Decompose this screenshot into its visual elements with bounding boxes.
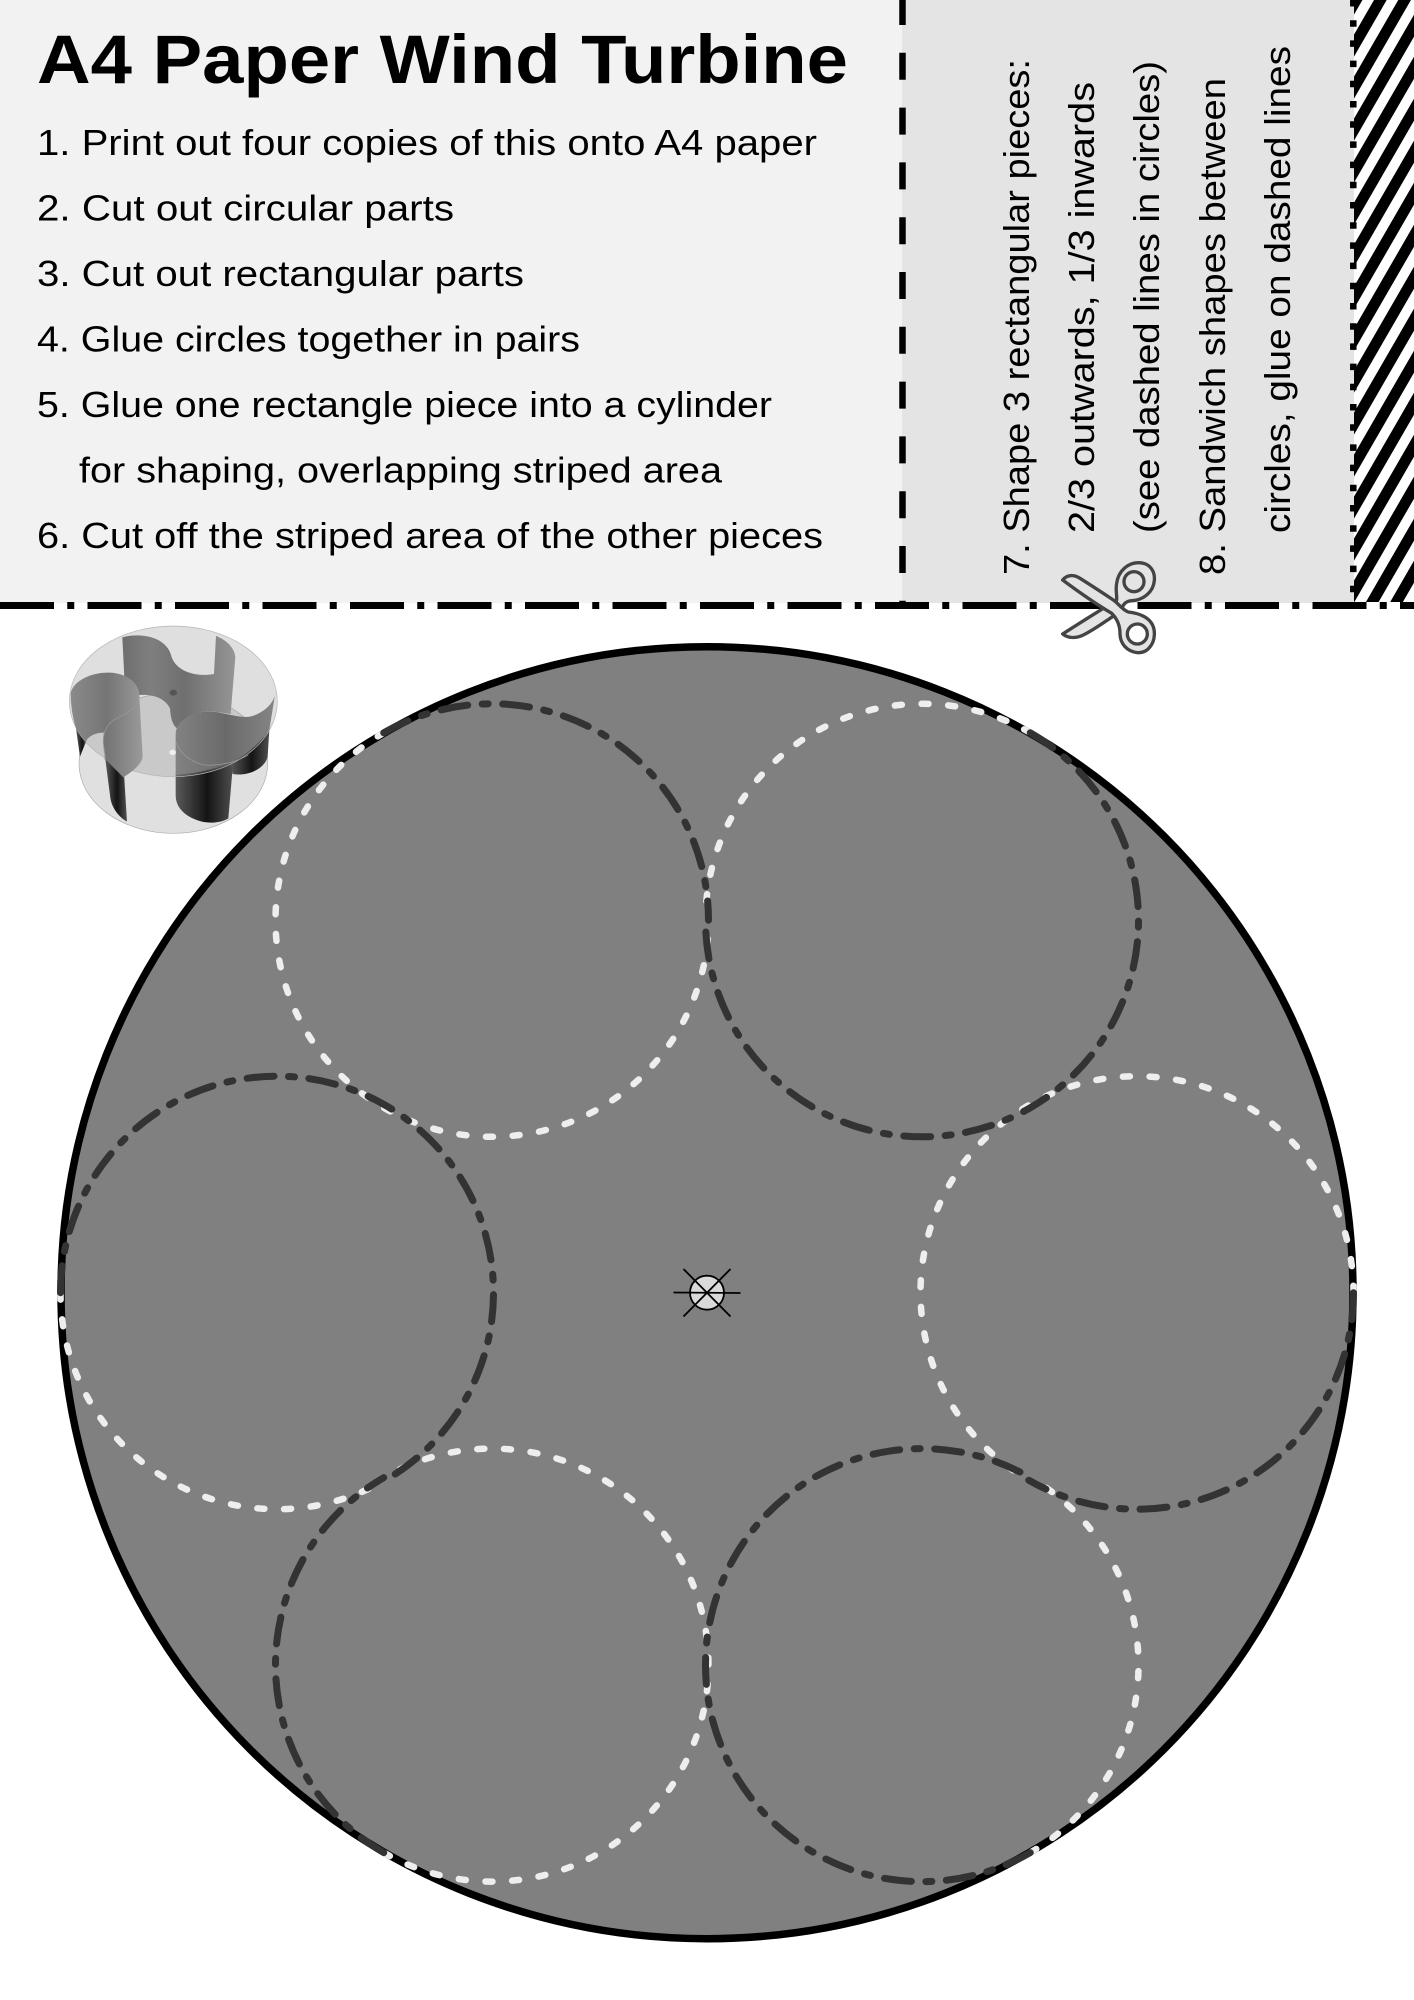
inward arcs: dash-dot dark	[60, 704, 1354, 1882]
blade lower sections	[76, 728, 269, 823]
step 3: 3. Cut out rectangular parts	[37, 253, 524, 294]
bottom disc centre hole	[169, 750, 176, 755]
top disc centre hole	[170, 690, 177, 696]
vertical cut line	[899, 0, 906, 606]
step 1: 1. Print out four copies of this onto A4 paper	[37, 122, 817, 163]
icon: assembled turbine	[69, 626, 277, 833]
panel: rotated instructions	[902, 0, 1354, 603]
step 2: 2. Cut out circular parts	[37, 188, 454, 228]
step 7 outwards and inwards: 2/3 outwards, 1/3 inwards	[1061, 82, 1102, 533]
top disc	[69, 626, 277, 777]
striped overlap area	[1354, 0, 1414, 602]
step 8 continued: circles, glue on dashed lines	[1257, 46, 1298, 533]
right blade	[176, 691, 276, 775]
horizontal cut line	[0, 602, 1414, 609]
step 7: 7. Shape 3 rectangular pieces:	[996, 59, 1037, 575]
step 5 continued: for shaping, overlapping striped area	[79, 450, 723, 490]
blade inner edges	[103, 697, 139, 760]
back blade	[122, 635, 235, 728]
title: A4 Paper Wind Turbine	[37, 21, 848, 98]
icon: scissors	[1063, 563, 1154, 653]
step 6: 6. Cut off the striped area of the other pieces	[37, 515, 823, 556]
step 7 note: (see dashed lines in circles)	[1126, 61, 1167, 533]
centre mark	[674, 1269, 740, 1316]
step 4: 4. Glue circles together in pairs	[37, 318, 580, 360]
cut-out disc	[60, 647, 1354, 1939]
step 5: 5. Glue one rectangle piece into a cylinder	[37, 384, 772, 425]
vertical fold line	[1350, 0, 1357, 603]
left blade	[71, 673, 143, 777]
bottom disc	[79, 693, 268, 833]
blade front edge	[176, 742, 248, 765]
outward arcs: dotted white	[60, 704, 1354, 1882]
panel: instructions	[0, 0, 902, 603]
step 8: 8. Sandwich shapes between	[1192, 78, 1233, 575]
